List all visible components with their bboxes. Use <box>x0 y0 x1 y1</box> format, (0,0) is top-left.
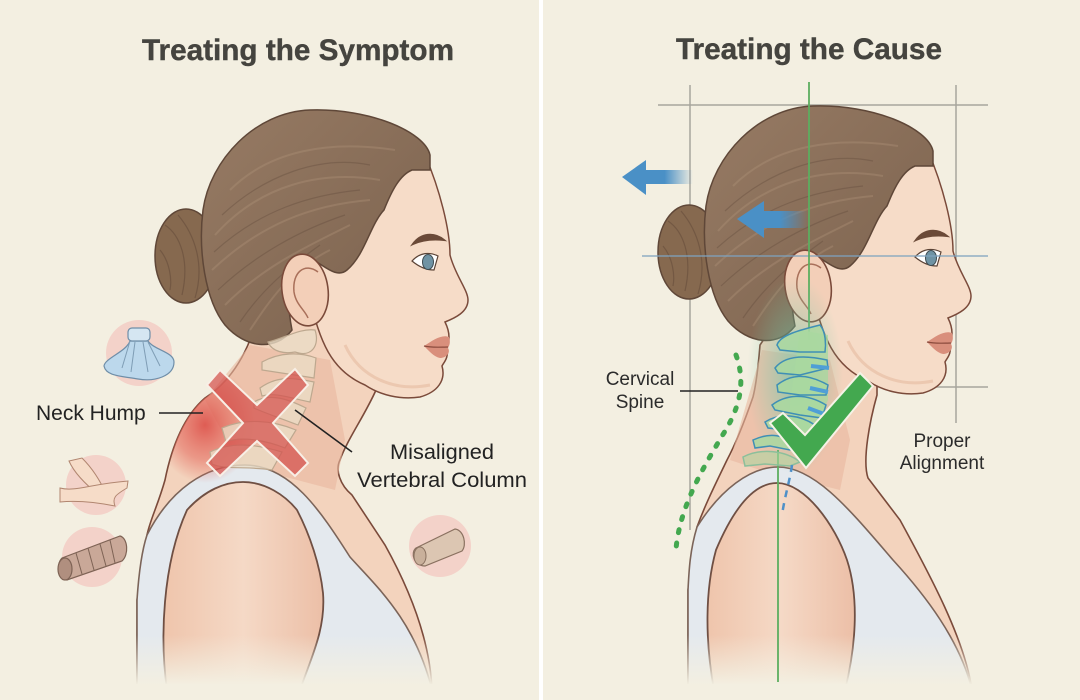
label: proper alignment: Proper <box>913 431 971 452</box>
green check mark <box>770 373 873 468</box>
icon: neck support pillow <box>409 515 471 577</box>
blue dashed ideal line <box>782 465 792 515</box>
label: neck hump: Neck Hump <box>36 402 146 425</box>
label: cervical spine: Spine <box>616 392 664 413</box>
panel: treating the symptom <box>36 34 527 700</box>
title: treating the symptom: Treating the Symptom <box>142 34 454 67</box>
icon: massage hands <box>60 455 128 515</box>
label: cervical spine <box>606 369 738 413</box>
green dotted curve <box>676 355 741 549</box>
neck hump redness <box>170 386 242 480</box>
label: proper alignment <box>900 431 985 474</box>
icon: ice pack <box>104 320 174 386</box>
label: misaligned vertebral column <box>295 410 527 492</box>
title: treating the cause: Treating the Cause <box>676 33 942 66</box>
label: cervical spine: Cervical <box>606 369 674 390</box>
alignment grid lines <box>658 85 988 530</box>
aligned spine <box>743 275 843 475</box>
blue arrow: inner <box>737 201 808 238</box>
figure: woman with forward head posture <box>120 110 468 700</box>
divider between panels <box>539 0 543 700</box>
panel: treating the cause <box>606 33 990 700</box>
label: misaligned vertebral column: Misaligned <box>390 441 494 464</box>
misaligned vertebrae <box>210 330 316 470</box>
figure: woman with corrected posture <box>658 106 990 700</box>
label: proper alignment: Alignment <box>900 453 985 474</box>
horizontal ear-level line <box>642 255 988 257</box>
icon: foam roller <box>58 527 127 587</box>
label: misaligned vertebral column: Vertebral Column <box>357 469 527 492</box>
blue arrow: outer <box>622 160 693 195</box>
red cross mark <box>207 369 308 476</box>
green vertical plumb line <box>778 82 809 682</box>
